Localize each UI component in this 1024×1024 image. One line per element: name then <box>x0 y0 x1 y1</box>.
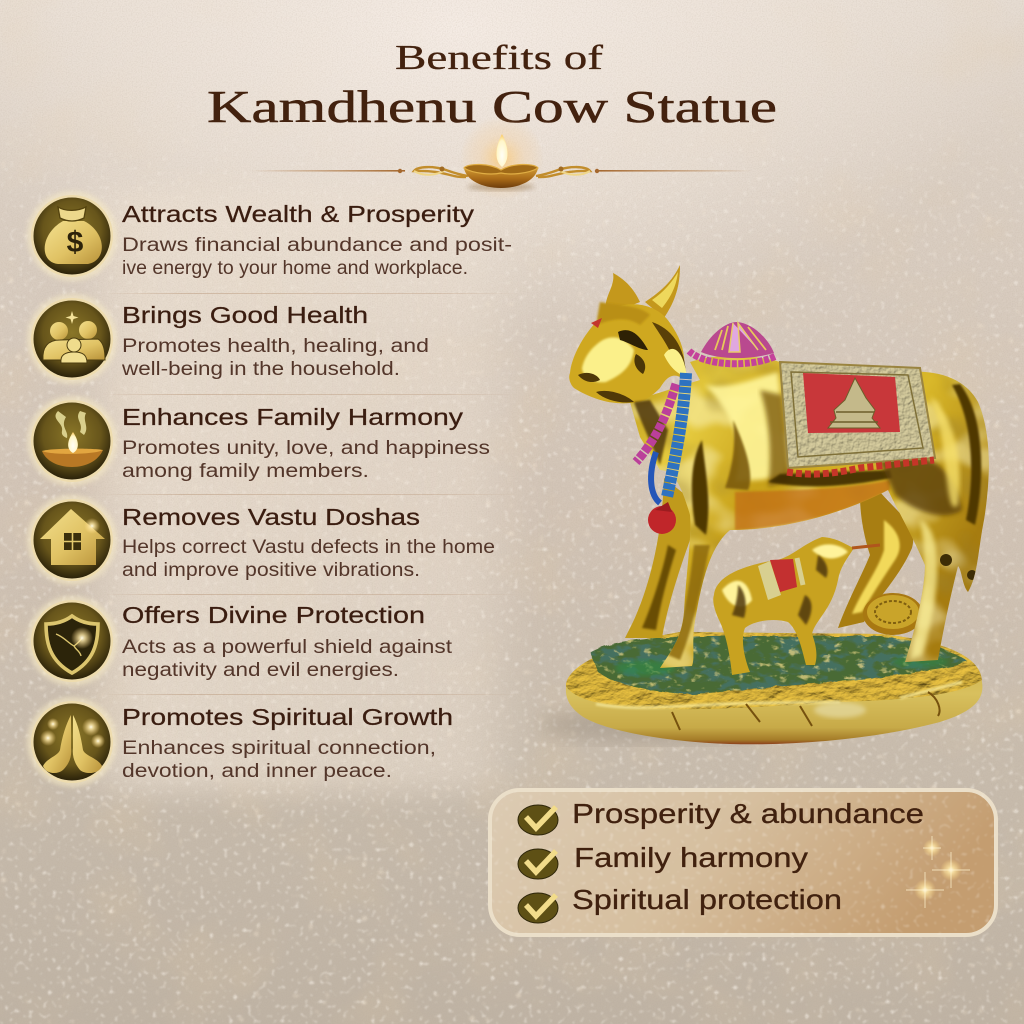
description <box>122 537 495 581</box>
title <box>207 38 777 132</box>
heading: Enhances Family Harmony <box>122 404 463 430</box>
far front leg <box>625 478 692 638</box>
icon: money bag <box>27 191 117 281</box>
statue: Kamdhenu cow and calf <box>540 265 1000 744</box>
sparkles <box>906 836 970 908</box>
check item 1: Prosperity & abundance <box>572 798 924 829</box>
description <box>122 637 453 681</box>
benefit 1: wealth <box>27 191 512 281</box>
description <box>122 738 436 782</box>
heading: Attracts Wealth & Prosperity <box>122 201 474 227</box>
statue shadow <box>540 707 760 743</box>
list dividers <box>100 293 520 695</box>
benefit 2: health <box>27 294 429 384</box>
heading line: Benefits of: Benefits of <box>395 38 603 77</box>
garlands and bell <box>636 373 686 534</box>
icon: lamp and smoke <box>27 396 117 486</box>
heading: Removes Vastu Doshas <box>122 504 420 530</box>
body reflections <box>630 357 989 668</box>
heading: Promotes Spiritual Growth <box>122 704 453 730</box>
divider with diya lamp <box>250 116 753 200</box>
icon: family <box>27 294 117 384</box>
benefit 4: vastu <box>27 495 495 585</box>
description: Promotes health, healing, and <box>122 336 429 357</box>
check item 2 <box>518 842 808 879</box>
saddle blanket <box>775 358 940 474</box>
description: Promotes unity, love, and happiness <box>122 438 490 459</box>
panel glitter <box>490 790 996 935</box>
benefit 3: family harmony <box>27 396 490 486</box>
description: among family members. <box>122 461 369 482</box>
description: Acts as a powerful shield against <box>122 637 453 658</box>
calf <box>713 537 880 675</box>
heading: Brings Good Health <box>122 302 368 328</box>
dome cover on hump <box>689 322 776 364</box>
description: well-being in the household. <box>121 359 400 380</box>
description: devotion, and inner peace. <box>122 761 392 782</box>
description: Draws financial abundance and posit- <box>122 235 512 256</box>
benefit 5: protection <box>27 596 453 686</box>
description <box>122 438 490 482</box>
checklist panel <box>490 790 996 935</box>
description <box>121 336 429 380</box>
check item 3: Spiritual protection <box>572 884 842 915</box>
icon: house <box>27 495 117 585</box>
description: Helps correct Vastu defects in the home <box>122 537 495 558</box>
far hind leg <box>838 492 913 628</box>
check item 3 <box>518 884 842 923</box>
description <box>122 235 512 279</box>
icon: shield <box>27 596 117 686</box>
check item 2: Family harmony <box>574 842 808 873</box>
description: and improve positive vibrations. <box>122 560 420 581</box>
description: negativity and evil energies. <box>122 660 399 681</box>
description: ive energy to your home and workplace. <box>122 258 468 279</box>
icon: money bag: $ <box>67 226 84 259</box>
head and horns <box>569 265 687 465</box>
cow body <box>630 356 989 668</box>
heading: Offers Divine Protection <box>122 602 425 628</box>
description: Enhances spiritual connection, <box>122 738 436 759</box>
icon: praying hands <box>27 697 117 787</box>
statue base <box>560 625 990 744</box>
gold coin <box>863 593 923 635</box>
check item 1 <box>518 798 924 835</box>
heading line: Kamdhenu Cow Statue: Kamdhenu Cow Statue <box>207 81 777 132</box>
benefit 6: spiritual growth <box>27 697 453 787</box>
